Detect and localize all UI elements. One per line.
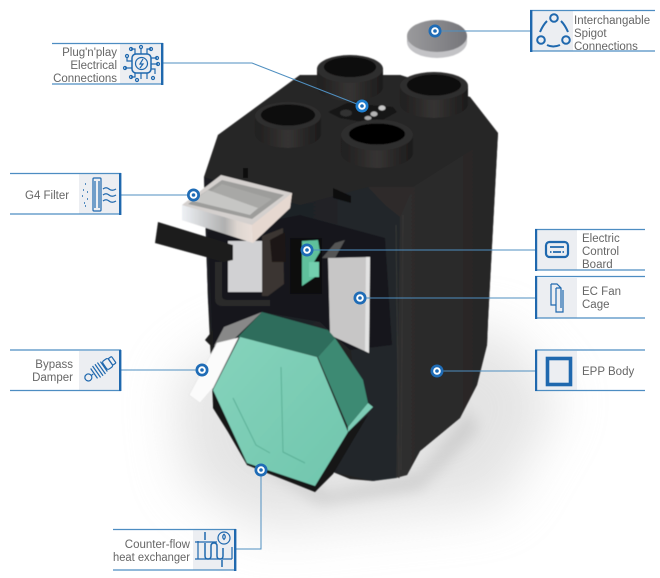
interchangeable spigot cap xyxy=(407,20,467,58)
marker: damper xyxy=(196,364,208,376)
duct: left xyxy=(255,102,321,148)
marker: spigot xyxy=(428,24,442,38)
callout: EC fan cage: Cage xyxy=(582,299,610,311)
callout: interchangable spigot connections: Interchangable xyxy=(574,15,650,27)
icon: circuit with lightning bolt xyxy=(124,46,160,82)
callout: bypass damper: Bypass xyxy=(35,359,73,371)
control pad xyxy=(328,103,397,124)
callout: G4 filter: G4 Filter xyxy=(25,190,69,202)
callout: interchangable spigot connections: Spigot xyxy=(574,28,607,40)
callout: electric control board: Control xyxy=(582,246,619,258)
marker: fan cage xyxy=(354,292,366,304)
callout: interchangable spigot connections xyxy=(530,10,655,53)
callout: G4 filter xyxy=(10,173,121,215)
callout: electric control board: Electric xyxy=(582,233,620,245)
G4 filter tray xyxy=(182,175,292,243)
callout: plug'n'play electrical connections: Connections xyxy=(53,73,117,85)
marker: electrical connections xyxy=(356,100,368,112)
icon: keyboard board xyxy=(546,242,568,257)
ventilation unit product illustration xyxy=(155,20,498,492)
icon: damper spring xyxy=(81,354,118,385)
marker dots xyxy=(187,24,444,476)
grey fan cage door xyxy=(322,240,370,353)
callout: electric control board: Board xyxy=(582,259,613,271)
marker: control board xyxy=(300,244,314,256)
callout: plug'n'play electrical connections: Electrical xyxy=(70,60,117,72)
floor shadow xyxy=(175,330,560,530)
callout: plug'n'play electrical connections xyxy=(52,43,163,85)
callout: EC fan cage xyxy=(535,276,645,319)
callout: counter-flow heat exchanger: heat exchanger xyxy=(113,552,190,564)
callout: EPP body xyxy=(535,350,645,391)
icon: fan cage door xyxy=(551,284,563,312)
marker: filter xyxy=(187,188,200,202)
callout: plug'n'play electrical connections: Plug'n'play xyxy=(62,47,117,59)
callout: counter-flow heat exchanger: Counter-flow xyxy=(125,539,191,551)
heat exchanger xyxy=(213,312,373,492)
black handle xyxy=(155,222,233,262)
callout: bypass damper xyxy=(10,350,121,391)
callout: counter-flow heat exchanger xyxy=(113,529,236,571)
icon: coiled heat exchanger xyxy=(195,532,232,567)
duct: back xyxy=(317,55,383,101)
duct: front xyxy=(341,120,413,168)
callout: interchangable spigot connections: Connections xyxy=(574,41,638,53)
icon: square body outline xyxy=(548,358,570,384)
callout: electric control board xyxy=(535,229,645,271)
unit body xyxy=(204,75,498,492)
cavity xyxy=(208,215,392,350)
marker: heat exchanger xyxy=(254,464,268,476)
bypass damper xyxy=(189,312,262,403)
icon: filter with air waves xyxy=(82,178,116,211)
leader lines xyxy=(121,31,535,549)
callout: bypass damper: Damper xyxy=(32,372,73,384)
icon: three connected nodes xyxy=(537,14,570,46)
green circuit board xyxy=(302,240,320,286)
callout: EPP body: EPP Body xyxy=(582,366,634,378)
ducts xyxy=(255,55,468,168)
marker: body xyxy=(430,364,444,378)
callout: EC fan cage: EC Fan xyxy=(582,286,621,298)
duct: right xyxy=(400,72,468,118)
